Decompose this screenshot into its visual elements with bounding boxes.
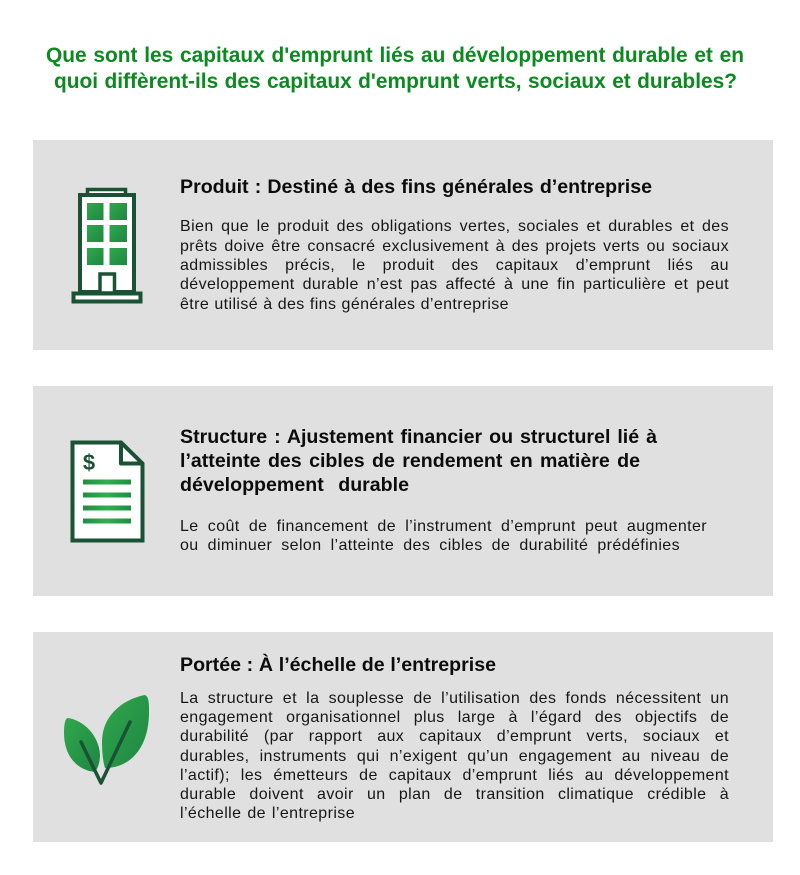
text: l’échelle de l’entreprise bbox=[180, 805, 355, 822]
text: structure bbox=[180, 518, 707, 554]
text: Portée : À l’échelle de l’entreprise bbox=[180, 654, 496, 676]
text: prêts doive être consacré exclusivement à des projets verts ou sociaux bbox=[180, 238, 729, 255]
title: quoi diffèrent-ils des capitaux d'emprunt verts, sociaux et durables? bbox=[54, 70, 737, 93]
heading: structure bbox=[180, 426, 658, 496]
text: l’actif); les émetteurs de capitaux d’emprunt liés au développement bbox=[180, 767, 729, 784]
text: produit bbox=[180, 218, 729, 313]
text: engagement organisationnel plus large à l’égard des objectifs de bbox=[180, 709, 729, 726]
text: portée bbox=[180, 690, 729, 822]
text: développement durable n’est pas affecté à une fin particulière et peut bbox=[180, 276, 729, 293]
text: La structure et la souplesse de l’utilisation des fonds nécessitent un bbox=[180, 690, 729, 707]
panel: structure bbox=[33, 386, 773, 596]
text: durable doivent avoir un plan de transition climatique crédible à bbox=[180, 786, 729, 803]
text: durabilité (par rapport aux capitaux d’emprunt verts, sociaux et bbox=[180, 728, 729, 745]
text: Bien que le produit des obligations vertes, sociales et durables et des bbox=[180, 218, 729, 235]
text: Structure : Ajustement financier ou structurel lié à bbox=[180, 426, 657, 448]
text: être utilisé à des fins générales d’entreprise bbox=[180, 296, 509, 313]
text: ou diminuer selon l’atteinte des cibles de durabilité prédéfinies bbox=[180, 537, 680, 554]
text: développement durable bbox=[180, 474, 409, 496]
title bbox=[46, 44, 744, 93]
panel: produit bbox=[33, 140, 773, 350]
icon: document with dollar: $ bbox=[83, 450, 95, 475]
text: Le coût de financement de l’instrument d’emprunt peut augmenter bbox=[180, 518, 707, 535]
text: l’atteinte des cibles de rendement en matière de bbox=[180, 450, 640, 472]
title: Que sont les capitaux d'emprunt liés au développement durable et en bbox=[46, 44, 744, 67]
panel: portée bbox=[33, 632, 773, 842]
text: Produit : Destiné à des fins générales d’entreprise bbox=[180, 176, 652, 198]
text: durables, instruments qui n’exigent qu’un engagement au niveau de bbox=[180, 748, 729, 765]
text: admissibles précis, le produit des capitaux d’emprunt liés au bbox=[180, 257, 729, 274]
